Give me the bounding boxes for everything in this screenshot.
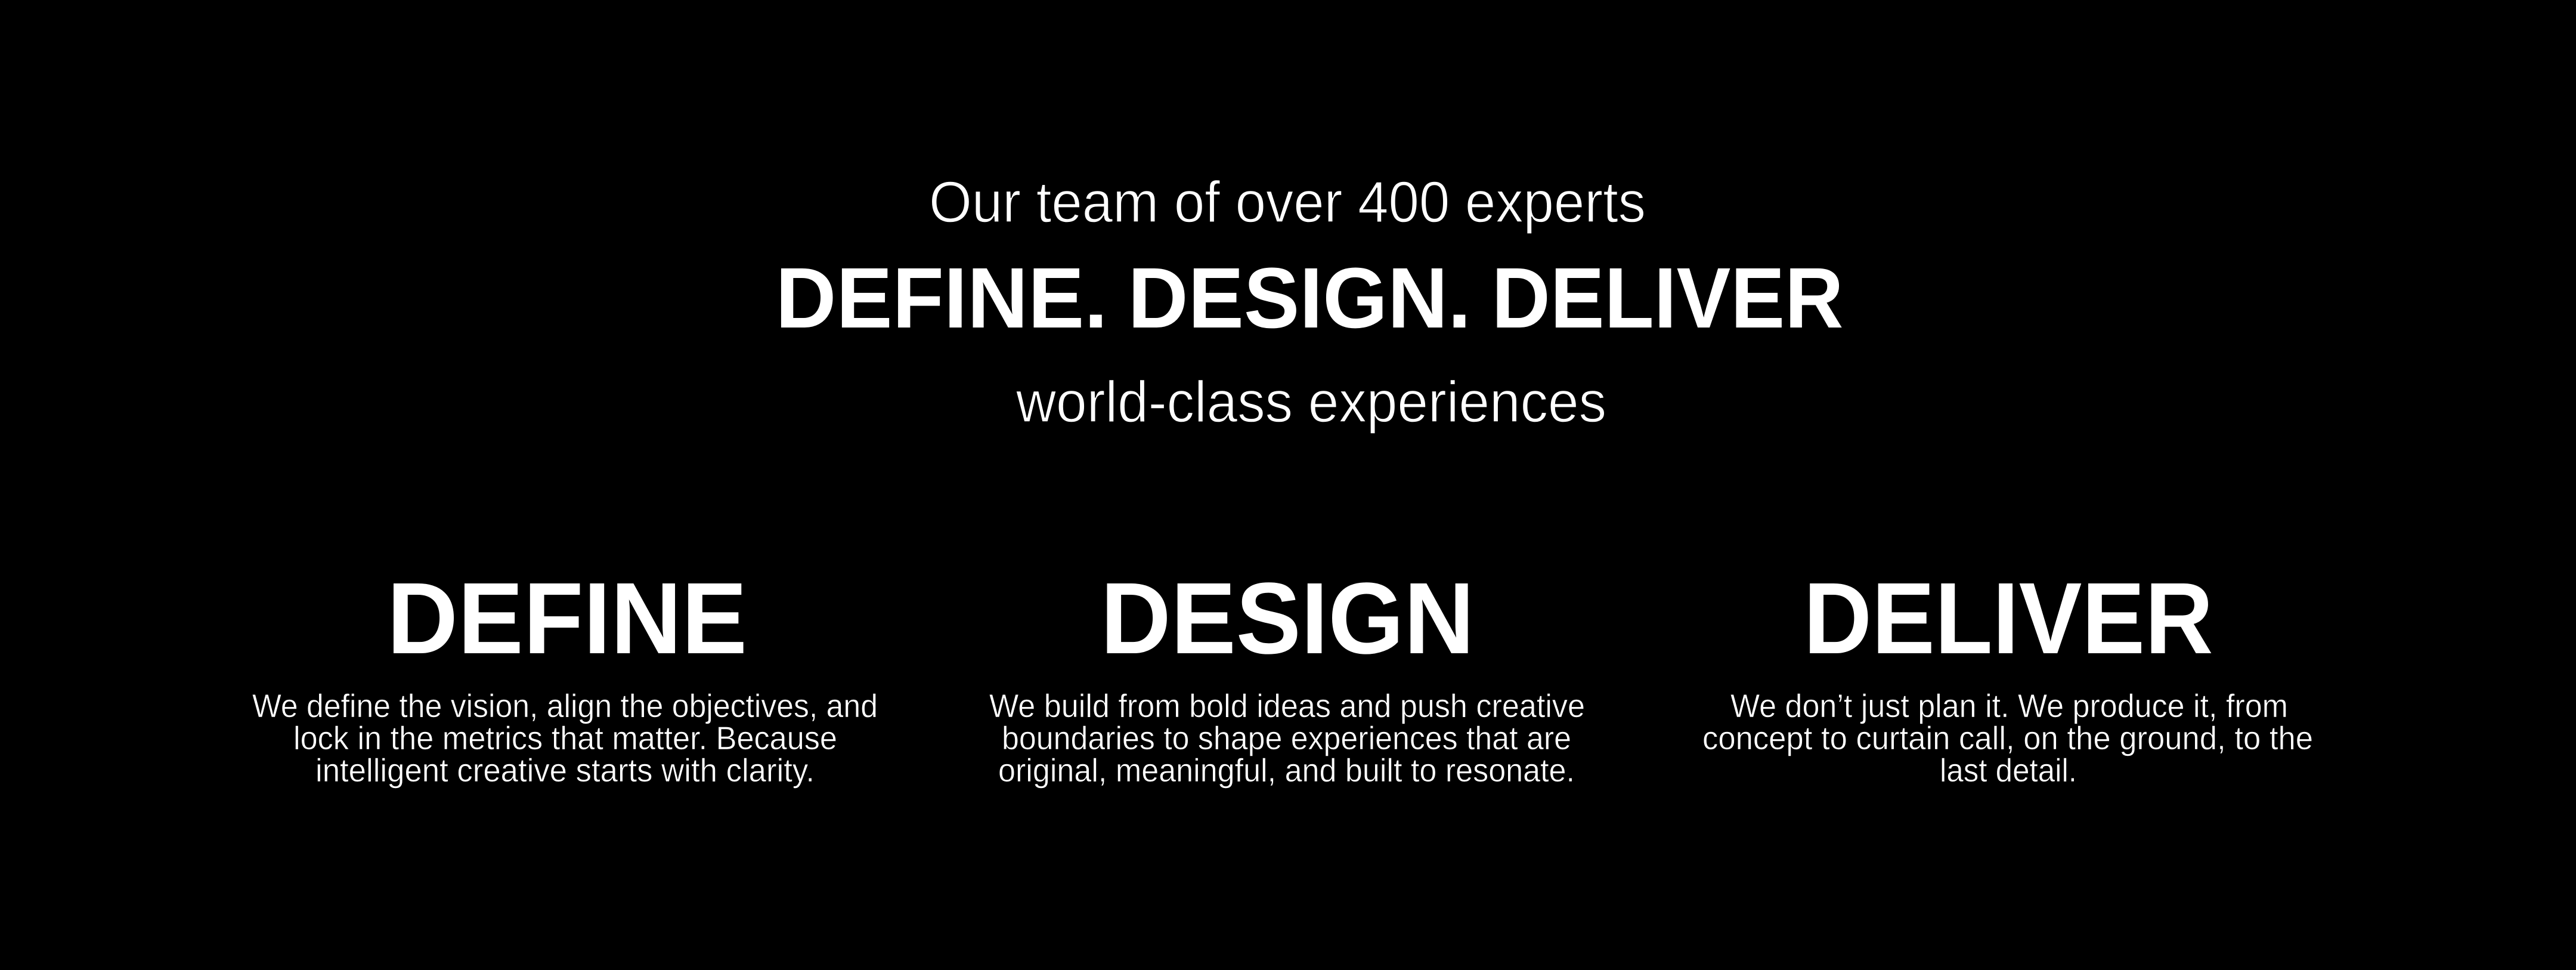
main title: DEFINE. — [775, 250, 1108, 346]
text block: design description — [989, 687, 1585, 789]
panel: define — [252, 562, 878, 789]
main title — [775, 250, 1844, 346]
heading: deliver: DELIVER — [1804, 562, 2213, 675]
heading: define: DEFINE — [387, 562, 747, 675]
intro line: Our team of over 400 experts — [929, 169, 1646, 234]
text block: define description: We define the vision, align the objectives, and — [252, 687, 878, 724]
text block: deliver description: We don’t just plan it. We produce it, from — [1730, 687, 2288, 724]
text block: design description: boundaries to shape experiences that are — [1002, 719, 1571, 756]
heading: design: DESIGN — [1101, 562, 1475, 675]
text block: deliver description: last detail. — [1940, 752, 2077, 789]
text block: define description — [252, 687, 878, 789]
text block: define description: intelligent creative starts with clarity. — [315, 752, 815, 789]
text block: deliver description: concept to curtain call, on the ground, to the — [1702, 719, 2313, 756]
main title: DESIGN. — [1128, 250, 1471, 346]
panel: deliver — [1702, 562, 2313, 789]
text block: design description: We build from bold ideas and push creative — [989, 687, 1585, 724]
main title: DELIVER — [1492, 250, 1844, 346]
text block: deliver description — [1702, 687, 2313, 789]
header block — [775, 169, 1844, 434]
text block: define description: lock in the metrics that matter. Because — [293, 719, 837, 756]
closing line: world-class experiences — [1015, 369, 1606, 434]
panel: design — [989, 562, 1585, 789]
text block: design description: original, meaningful, and built to resonate. — [998, 752, 1575, 789]
